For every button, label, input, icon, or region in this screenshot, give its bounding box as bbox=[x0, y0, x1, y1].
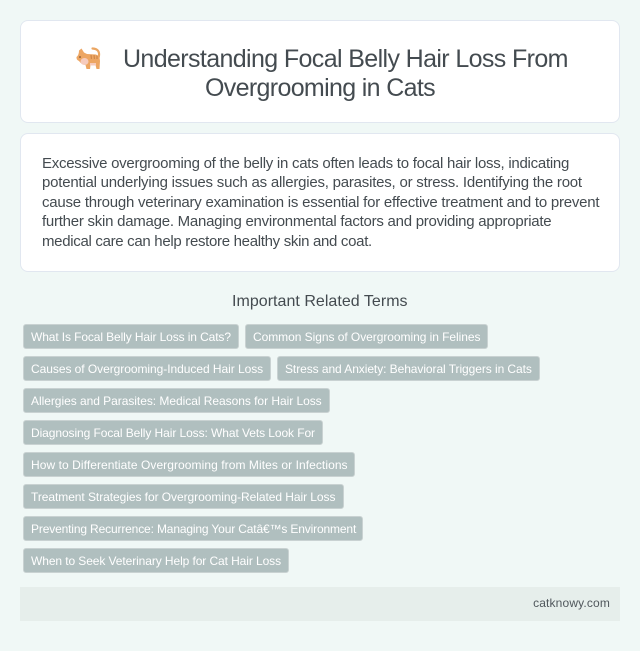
footer bar bbox=[20, 587, 620, 621]
tag: signs of overgrooming: Common Signs of Overgrooming in Felines bbox=[253, 330, 480, 344]
tag: causes: Causes of Overgrooming-Induced Hair Loss bbox=[31, 362, 263, 376]
panel: title card bbox=[20, 20, 620, 123]
tag: stress and anxiety bbox=[277, 356, 540, 381]
tag: allergies and parasites bbox=[23, 388, 330, 413]
summary line 5: medical care can help restore healthy skin and coat. bbox=[42, 233, 372, 250]
tag: differentiate: How to Differentiate Overgrooming from Mites or Infections bbox=[31, 458, 348, 472]
summary line 1: Excessive overgrooming of the belly in cats often leads to focal hair loss, indicating bbox=[42, 155, 569, 172]
tag: allergies and parasites: Allergies and Parasites: Medical Reasons for Hair Loss bbox=[31, 394, 322, 408]
tag: stress and anxiety: Stress and Anxiety: Behavioral Triggers in Cats bbox=[285, 362, 532, 376]
tag: preventing recurrence bbox=[23, 516, 363, 541]
title line 1: Understanding Focal Belly Hair Loss From bbox=[123, 45, 568, 73]
tag: focal belly hair loss bbox=[23, 324, 239, 349]
tag: treatment bbox=[23, 484, 344, 509]
summary line 2: potential underlying issues such as allergies, parasites, or stress. Identifying the root bbox=[42, 174, 582, 191]
tag: signs of overgrooming bbox=[245, 324, 488, 349]
footer: site name: catknowy.com bbox=[533, 596, 610, 610]
icon: cat bbox=[76, 47, 100, 69]
tag: veterinary help: When to Seek Veterinary Help for Cat Hair Loss bbox=[31, 554, 281, 568]
panel: summary text bbox=[20, 133, 620, 272]
tag: differentiate bbox=[23, 452, 355, 477]
heading: related terms: Important Related Terms bbox=[232, 293, 408, 310]
tag: causes bbox=[23, 356, 271, 381]
tag: preventing recurrence: Preventing Recurrence: Managing Your Catâ€™s Environment bbox=[31, 522, 356, 536]
tag: diagnosing bbox=[23, 420, 323, 445]
summary line 4: further skin damage. Managing environmental factors and providing appropriate bbox=[42, 213, 551, 230]
summary line 3: cause through veterinary examination is essential for effective treatment and to prevent bbox=[42, 194, 599, 211]
tag: treatment: Treatment Strategies for Overgrooming-Related Hair Loss bbox=[31, 490, 335, 504]
tag: veterinary help bbox=[23, 548, 289, 573]
tag: diagnosing: Diagnosing Focal Belly Hair Loss: What Vets Look For bbox=[31, 426, 315, 440]
title line 2: Overgrooming in Cats bbox=[205, 74, 435, 102]
tag: focal belly hair loss: What Is Focal Belly Hair Loss in Cats? bbox=[31, 330, 231, 344]
